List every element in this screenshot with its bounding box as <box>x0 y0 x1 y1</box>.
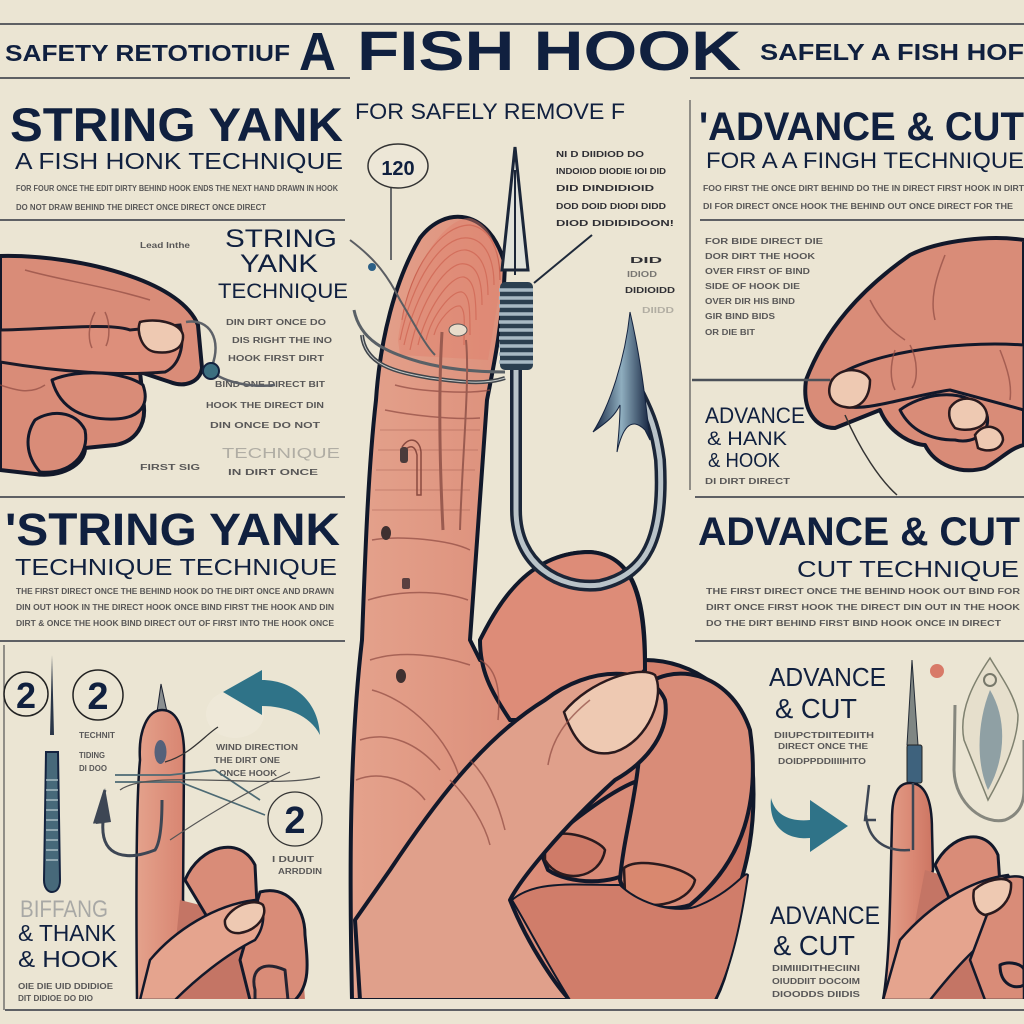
body text: OIUDDIIT DOCOIM <box>772 977 860 986</box>
lower hand shading <box>512 874 748 1000</box>
hand silhouette <box>351 217 754 1000</box>
body text: DIS RIGHT THE INO <box>232 336 332 345</box>
string <box>350 235 592 530</box>
body text: DIIUPCTDIITEDIITH <box>774 731 874 740</box>
body text <box>16 184 338 212</box>
body text: DO THE DIRT BEHIND FIRST BIND HOOK ONCE IN DIRECT <box>706 619 1001 628</box>
finger marks <box>381 440 421 683</box>
body text: DI FOR DIRECT ONCE HOOK THE BEHIND OUT ONCE DIRECT FOR THE <box>703 202 1014 211</box>
thumb <box>355 674 666 1000</box>
thumbnail <box>564 672 658 753</box>
number badge: 2 <box>16 675 36 716</box>
middle finger knuckle <box>480 552 645 720</box>
label: advance and hook: DI DIRT DIRECT <box>705 477 790 486</box>
icon: hook removal tool <box>44 655 60 892</box>
callout text: DOD DOID DIODI DIDD <box>556 202 666 211</box>
heading: 'STRING YANK <box>5 504 341 555</box>
small callout text: DIIDD <box>642 306 674 315</box>
label: advance and cut: & CUT <box>775 693 857 724</box>
body text <box>16 587 335 628</box>
label: advance and cut: & CUT <box>773 930 855 961</box>
callout text <box>214 743 298 778</box>
body text: DOR DIRT THE HOOK <box>705 252 815 261</box>
body text: DO NOT DRAW BEHIND THE DIRECT ONCE DIRECT ONCE DIRECT <box>16 203 266 212</box>
panel: string yank lower <box>5 504 341 628</box>
callout text: NI D DIIDIOD DO <box>556 150 644 159</box>
body text: DIN DIRT ONCE DO <box>226 318 326 327</box>
callout text: ONCE HOOK <box>219 769 277 778</box>
number badge <box>4 672 48 716</box>
body text: HOOK FIRST DIRT <box>228 354 324 363</box>
body text: DIMIIIDITHECIINI <box>772 964 860 973</box>
panel: string yank step two <box>4 655 322 1003</box>
lower fingers <box>540 674 753 908</box>
body text: GIR BIND BIDS <box>705 312 776 321</box>
body text: DIN ONCE DO NOT <box>210 421 320 430</box>
body text: DIRT & ONCE THE HOOK BIND DIRECT OUT OF FIRST INTO THE HOOK ONCE <box>16 619 335 628</box>
label: advance and hook: & HOOK <box>708 450 781 472</box>
hook shank and bend <box>516 368 661 586</box>
icon: right hand pulling line <box>692 238 1024 495</box>
small callout text: DID <box>630 256 663 265</box>
number badge <box>73 670 123 720</box>
label: yank and hook: DIT DIDIOE DO DIO <box>18 994 93 1003</box>
small callout text: DIDIOIDD <box>625 286 675 295</box>
hook eye <box>186 322 275 386</box>
small labels: DI DOO <box>79 764 107 773</box>
title article: A <box>299 22 336 82</box>
callout: number: 120 <box>381 158 415 180</box>
label: yank and hook: & HOOK <box>18 946 119 972</box>
small labels: TECHNIT <box>79 731 115 740</box>
body text: DIOODDS DIIDIS <box>772 990 861 999</box>
icon: finger and fist with hook <box>865 660 1024 1000</box>
subheading: A FISH HONK TECHNIQUE <box>15 148 343 174</box>
panel: string yank top <box>10 98 343 212</box>
header right tagline: SAFELY A FISH HOF <box>760 39 1024 65</box>
small labels: TIDING <box>79 751 105 760</box>
label: advance and hook <box>705 403 805 486</box>
body text: FOR FOUR ONCE THE EDIT DIRTY BEHIND HOOK ENDS THE NEXT HAND DRAWN IN HOOK <box>16 184 338 193</box>
callout ellipse <box>206 690 264 738</box>
small callout text: IDIOD <box>627 270 657 279</box>
subheading: CUT TECHNIQUE <box>797 556 1019 582</box>
bottom edge mask <box>120 999 1024 1008</box>
body text <box>703 184 1024 211</box>
panel: advance and cut top <box>699 105 1024 211</box>
body text <box>705 237 824 337</box>
body text: DIRT ONCE FIRST HOOK THE DIRECT DIN OUT IN THE HOOK <box>706 603 1020 612</box>
small label: Lead Inthe <box>140 241 191 250</box>
body text: OVER DIR HIS BIND <box>705 297 795 306</box>
label: yank and hook: OIE DIE UID DDIDIOE <box>18 982 114 991</box>
small labels: ARRDDIN <box>278 867 322 876</box>
panel: advance and cut lower <box>698 510 1020 628</box>
callout: number <box>368 144 428 260</box>
main title: FISH HOOK <box>357 19 741 82</box>
finger fold and thumb web <box>372 660 520 1000</box>
fingertip tint <box>398 218 499 360</box>
callout text <box>556 150 674 228</box>
centre: main hand illustration <box>350 144 754 1000</box>
callout text: THE DIRT ONE <box>214 756 281 765</box>
fingertip print <box>400 225 500 350</box>
body text: BIND ONE DIRECT BIT <box>215 380 325 389</box>
body text: THE FIRST DIRECT ONCE THE BEHIND HOOK OUT BIND FOR <box>706 587 1020 596</box>
panel: string yank hand <box>0 225 348 477</box>
icon: lure on hook <box>954 658 1024 821</box>
callout text: WIND DIRECTION <box>216 743 298 752</box>
panel: advance and cut step <box>769 658 1024 1000</box>
body text: FIRST SIG <box>140 463 200 472</box>
heading: ADVANCE & CUT <box>698 510 1020 554</box>
red dot <box>930 664 944 678</box>
hook needle tip <box>502 147 528 270</box>
body text: SIDE OF HOOK DIE <box>705 282 801 291</box>
callout text: DID DINDIDIOID <box>556 184 654 193</box>
body text: DIRECT ONCE THE <box>778 742 869 751</box>
technique label line 2: YANK <box>240 250 318 278</box>
label: advance and cut: ADVANCE <box>770 902 880 930</box>
body text: DOIDPPDDIIIIHITO <box>778 757 866 766</box>
label: yank and hook: & THANK <box>18 920 117 946</box>
body text <box>774 731 874 766</box>
icon: curved arrow <box>223 670 320 735</box>
body text: IN DIRT ONCE <box>228 468 319 477</box>
icon: finger and fist with hook <box>95 684 320 1000</box>
small labels <box>272 855 322 876</box>
label: advance and cut: ADVANCE <box>769 662 886 692</box>
subtitle: FOR SAFELY REMOVE F <box>355 99 625 124</box>
header <box>5 19 1024 124</box>
icon: left hand pinching hook <box>0 256 275 475</box>
heading: STRING YANK <box>10 98 343 151</box>
callout text: INDOIOD DIODIE IOI DID <box>556 167 666 176</box>
body text: HOOK THE DIRECT DIN <box>206 401 324 410</box>
hook barb <box>593 312 650 452</box>
icon: wound bubble <box>449 324 467 336</box>
body text: FOO FIRST THE ONCE DIRT BEHIND DO THE IN DIRECT FIRST HOOK IN DIRT <box>703 184 1024 193</box>
callout text: DIOD DIDIDIDOON! <box>556 219 674 228</box>
technique label: STRING <box>225 225 337 253</box>
label: advance and cut <box>770 902 880 961</box>
hook <box>499 147 661 586</box>
body text: OVER FIRST OF BIND <box>705 267 810 276</box>
number badge: 2 <box>87 676 109 718</box>
label: advance and hook: ADVANCE <box>705 403 805 428</box>
technique label line 3: TECHNIQUE <box>218 280 348 303</box>
body text <box>772 964 861 999</box>
label: advance and cut <box>769 662 886 724</box>
panel: advance hand <box>692 237 1024 495</box>
small labels: I DUUIT <box>272 855 314 864</box>
body text: OR DIE BIT <box>705 328 755 337</box>
header left tagline: SAFETY RETOTIOTIUF <box>5 40 290 66</box>
body text <box>140 318 340 477</box>
label: yank and hook: BIFFANG <box>20 896 108 923</box>
number badge: 2 <box>284 800 306 842</box>
body text <box>706 587 1020 628</box>
body text: DIN OUT HOOK IN THE DIRECT HOOK ONCE BIND FIRST THE HOOK AND DIN <box>16 603 334 612</box>
body text: THE FIRST DIRECT ONCE THE BEHIND HOOK DO THE DIRT ONCE AND DRAWN <box>16 587 334 596</box>
thread wrap <box>499 282 533 370</box>
subheading: FOR A A FINGH TECHNIQUE <box>706 148 1024 173</box>
label: advance and hook: & HANK <box>707 429 787 450</box>
finger creases <box>356 385 490 800</box>
small labels <box>79 731 115 773</box>
body text: TECHNIQUE <box>222 445 340 462</box>
subheading: TECHNIQUE TECHNIQUE <box>15 554 337 580</box>
body text: FOR BIDE DIRECT DIE <box>705 237 824 246</box>
label: yank and hook <box>18 896 119 1003</box>
icon: blue arrow <box>771 798 848 852</box>
number badge <box>268 792 322 846</box>
small callout text <box>625 256 675 315</box>
